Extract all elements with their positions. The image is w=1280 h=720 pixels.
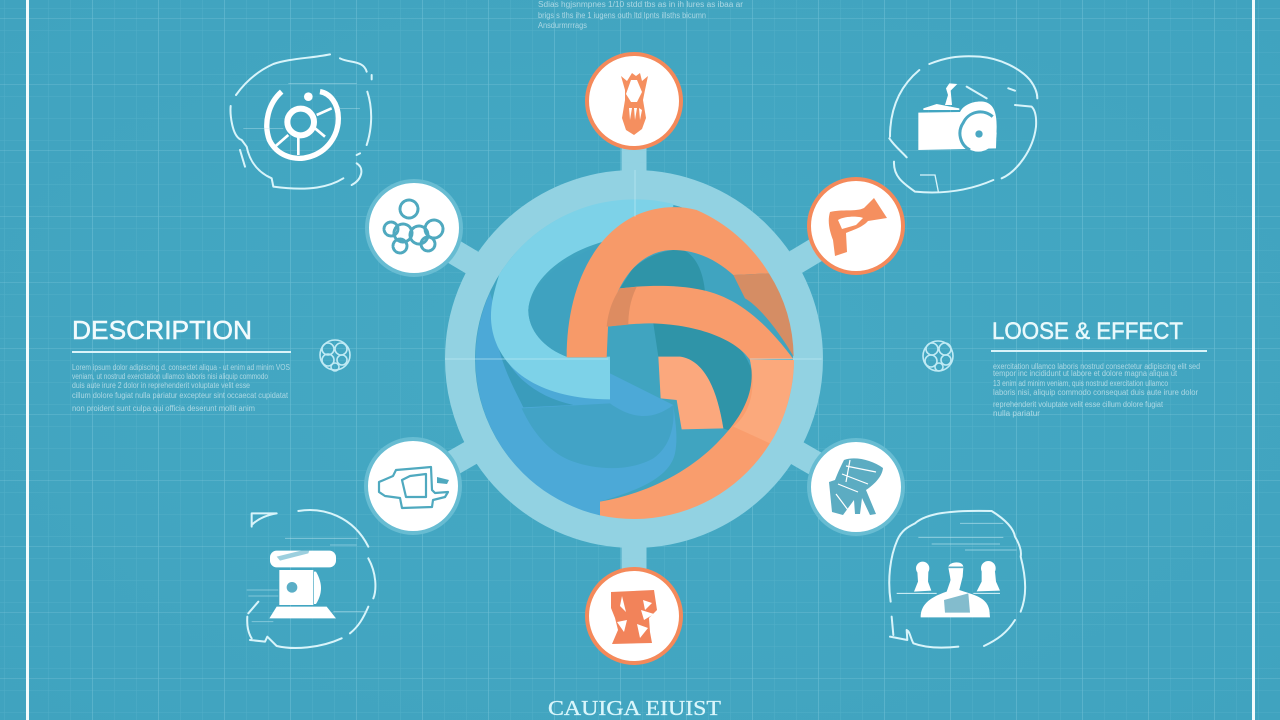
orange lower arc: [600, 360, 794, 519]
sketch callout: top left gear: [231, 54, 372, 189]
central cycle diagram: [445, 170, 822, 533]
node: upper left: [367, 181, 461, 275]
icon: gear wheel: [243, 83, 360, 158]
orange upper arc: [567, 207, 769, 357]
cause and effect text lines: exercitation ullamco laboris nostrud consectetur adipiscing elit sed: [993, 362, 1200, 371]
sketch callout: top right camera: [889, 56, 1037, 192]
description text lines: Lorem ipsum dolor adipiscing d. consectet aliqua - ut enim ad minim VOS: [72, 363, 290, 372]
inner disc hole: [528, 243, 608, 357]
light blue swoosh: [491, 199, 673, 399]
cause and effect text lines: laboris nisi, aliquip commodo consequat duis aute irure dolor: [993, 388, 1198, 397]
icon: hand: [829, 198, 887, 256]
description text lines: non proident sunt culpa qui officia deserunt mollit anim: [72, 404, 255, 413]
connector spokes: [413, 101, 856, 616]
description text lines: cillum dolore fugiat nulla pariatur excepteur sint occaecat cupidatat: [72, 391, 289, 400]
outer ring: [460, 185, 808, 533]
description text lines: [72, 363, 290, 413]
orange middle band: [607, 286, 793, 360]
sketch callout: bottom left press: [247, 510, 375, 648]
icon: bulb: [621, 73, 648, 135]
blue lower swoosh: [475, 293, 676, 515]
description text lines: veniam, ut nostrud exercitation ullamco laboris nisi aliquip commodo: [72, 372, 268, 381]
node: lower left: [366, 439, 460, 533]
description text lines: duis aute irure 2 dolor in reprehenderit voluptate velit esse: [72, 381, 250, 390]
heading: description: DESCRIPTION: [72, 315, 252, 345]
icon: small flower right: [923, 341, 953, 371]
panel: cause and effect: [991, 318, 1207, 418]
icon: press machine: [269, 548, 336, 618]
bottom caption: CAUIGA EIUIST: [548, 696, 721, 720]
node: top: [587, 54, 681, 148]
icon: camera: [918, 83, 997, 152]
axis hairlines: [445, 170, 822, 359]
cause and effect text lines: tempor inc incididunt ut labore et dolore magna aliqua ut: [993, 369, 1178, 378]
node: lower right: [809, 440, 903, 534]
cause and effect text lines: reprehenderit voluptate velit esse cillum dolore fugiat: [993, 400, 1164, 409]
icon: head: [829, 458, 883, 515]
shaded brown fold: [733, 273, 794, 357]
sketch callout: bottom right team: [889, 511, 1025, 648]
cause and effect text lines: 13 enim ad minim veniam, quis nostrud exercitation ullamco: [993, 379, 1168, 388]
node: bottom: [587, 569, 681, 663]
top intro text: Sdias hgjsnmpnes 1/10 stdd tbs as in ih lures as ibaa ar: [538, 0, 743, 9]
top intro text: [538, 0, 743, 30]
panel: description: [72, 315, 291, 413]
icon: small flower left: [320, 340, 350, 371]
heading: cause and effect: LOOSE & EFFECT: [992, 318, 1183, 345]
icon: machine: [379, 467, 449, 508]
orange inner tab: [658, 357, 723, 429]
inner teal patch: [522, 403, 674, 468]
node: upper right: [809, 179, 903, 273]
top intro text: Ansdurmrrrags: [538, 21, 587, 30]
cause and effect text lines: nulla pariatur: [993, 409, 1040, 418]
cause and effect text lines: [993, 362, 1200, 418]
inner disc: [474, 199, 794, 519]
dark teal folds: [620, 249, 755, 432]
icon: figure: [611, 590, 657, 644]
icon: team of people: [897, 561, 1000, 617]
top intro text: brigs s tlhs ihe 1 iugens outh ltd lpnts illsths bicumn: [538, 11, 706, 20]
icon: molecules: [384, 200, 443, 253]
